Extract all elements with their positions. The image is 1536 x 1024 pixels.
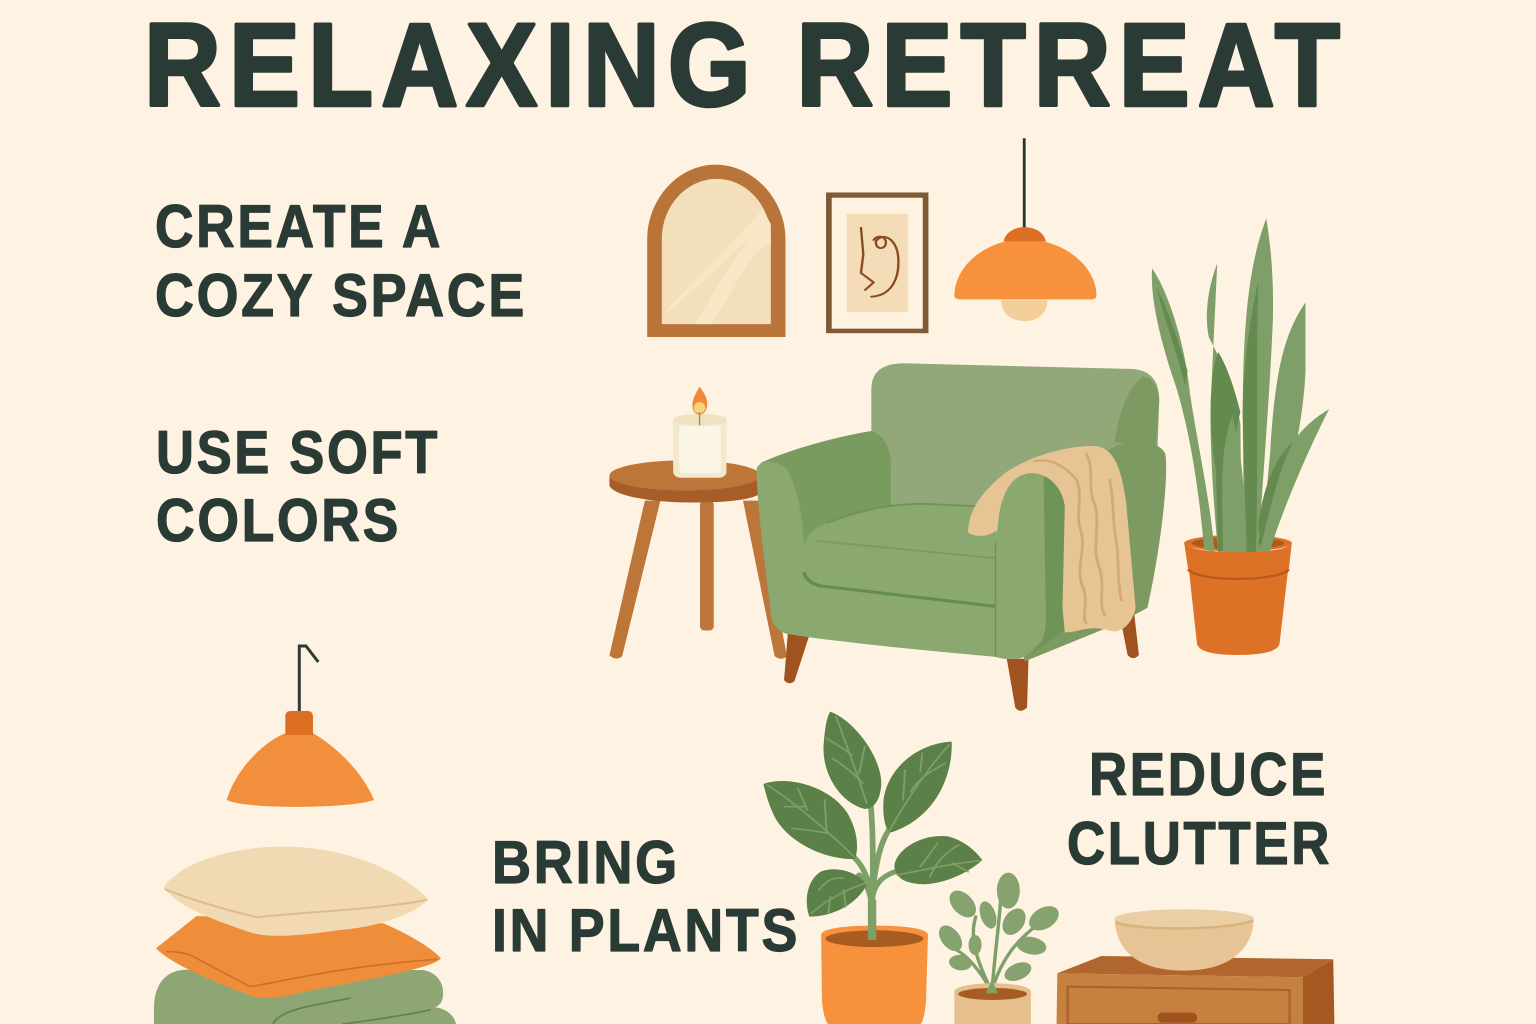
heading: bring in plants [492,829,800,964]
title: RELAXING RETREAT [144,0,1348,132]
heading: reduce clutter: CLUTTER [1067,810,1332,877]
heading: use soft colors: COLORS [156,487,401,554]
chair legs [784,614,1139,711]
icon: green folded blanket [154,970,456,1024]
icon: arched mirror [647,165,785,337]
icon: candle [673,387,727,478]
icon: armchair [757,363,1166,711]
heading: create a cozy space: COZY SPACE [155,262,527,329]
icon: snake plant [1152,218,1329,655]
throw blanket [968,446,1136,632]
right arm [995,473,1065,659]
heading: create a cozy space [155,193,527,329]
leaf veins [767,717,980,913]
heading: use soft colors: USE SOFT [156,419,440,486]
seat cushion [803,504,996,605]
room scene illustration [609,138,1329,711]
icon: orange pillow [156,916,441,998]
pillow stack and hanging lamp [154,646,456,1024]
icon: wooden dresser [1057,956,1334,1024]
chair back [871,363,1159,469]
icon: cream pillow [164,847,427,936]
left arm inner [760,431,891,551]
heading: create a cozy space: CREATE A [155,193,443,260]
icon: small potted plant [934,873,1064,1024]
chair front body [757,462,996,657]
icon: side table [609,460,787,659]
icon: hanging lamp [227,646,374,807]
outer right arm [996,442,1166,661]
leaves [763,712,982,917]
icon: large potted plant [763,712,982,1024]
heading: use soft colors [156,419,440,554]
icon: pendant lamp [954,138,1096,321]
icon: ceramic bowl [1115,909,1254,971]
plants and dresser [763,712,1334,1024]
terracotta pot [821,900,928,1024]
heading: bring in plants: BRING [492,829,680,896]
heading: reduce clutter [1067,741,1332,877]
heading: bring in plants: IN PLANTS [492,897,800,964]
heading: reduce clutter: REDUCE [1089,741,1328,808]
icon: framed line art [826,192,928,333]
